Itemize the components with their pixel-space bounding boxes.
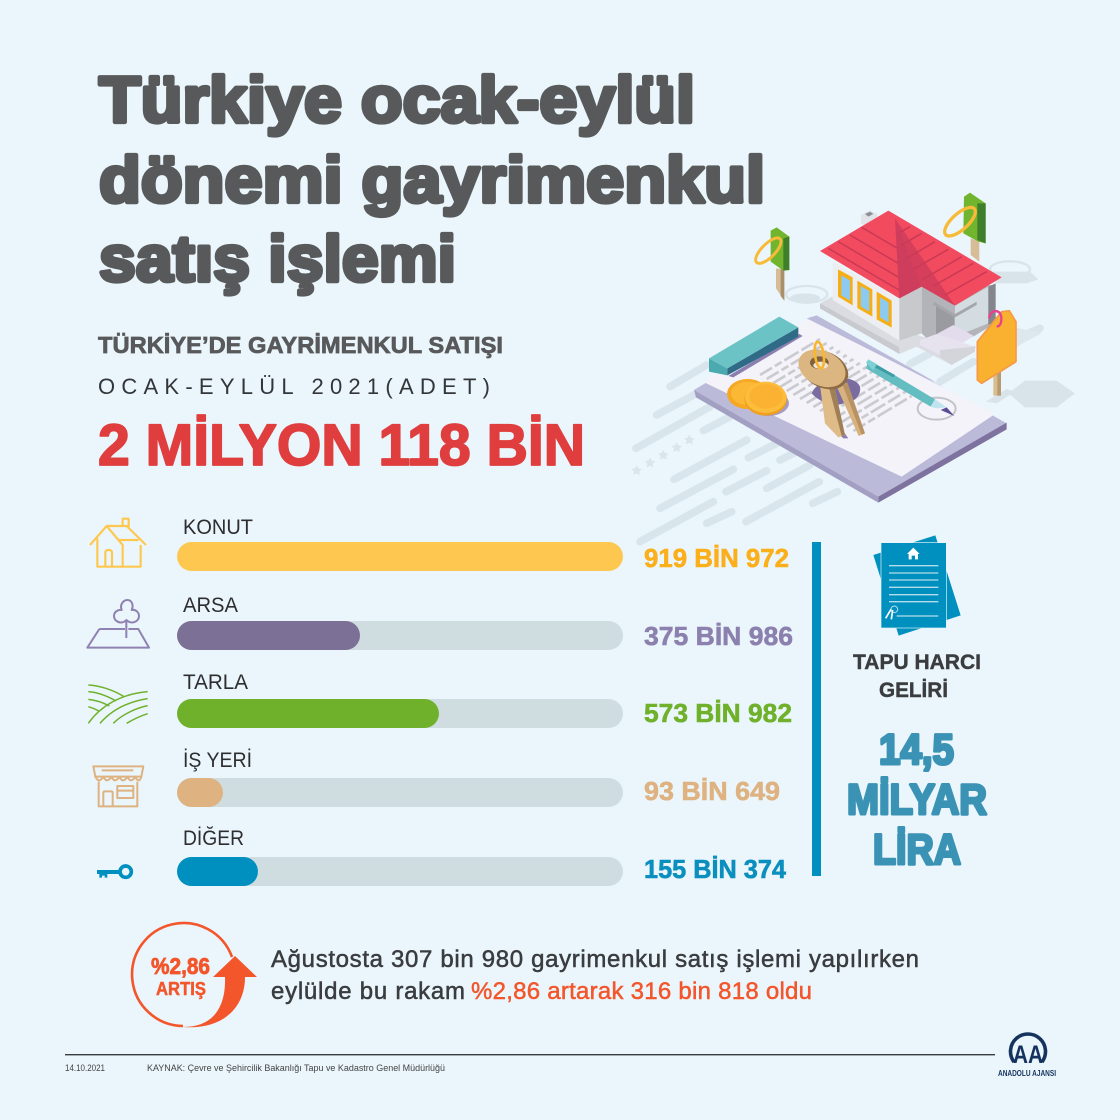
category: TARLA bbox=[88, 671, 792, 728]
title: satış işlemi bbox=[99, 222, 456, 295]
teal block bbox=[709, 317, 803, 377]
icon: house bbox=[90, 519, 146, 567]
heading bbox=[853, 651, 981, 702]
callout: increase bbox=[132, 923, 919, 1027]
increase label: ARTIŞ bbox=[156, 979, 206, 999]
logo: Anadolu Ajansı bbox=[998, 1034, 1056, 1078]
total figure: 2 MİLYON 118 BİN bbox=[98, 413, 585, 478]
footer rule bbox=[65, 1054, 995, 1055]
figure: MİLYAR bbox=[847, 776, 987, 824]
value: 375 BİN 986 bbox=[644, 621, 793, 651]
value: 573 BİN 982 bbox=[644, 698, 792, 728]
category: DİĞER bbox=[97, 827, 787, 886]
bar fill bbox=[177, 621, 360, 650]
title: Türkiye ocak-eylül bbox=[99, 63, 695, 136]
logo: Anadolu Ajansı: AA bbox=[1013, 1041, 1043, 1069]
category: ARSA bbox=[87, 594, 793, 651]
keys bbox=[792, 341, 865, 438]
logo: Anadolu Ajansı: ANADOLU AJANSI bbox=[998, 1069, 1056, 1078]
icon: title deed documents bbox=[873, 535, 961, 636]
pen bbox=[866, 359, 954, 416]
bar fill bbox=[177, 857, 258, 886]
stars bbox=[631, 435, 695, 475]
label: KONUT bbox=[183, 516, 253, 539]
roof bbox=[820, 211, 1002, 306]
house bbox=[820, 211, 1002, 365]
ground shadows bbox=[786, 261, 1075, 407]
stamp circle bbox=[918, 398, 956, 420]
illustration: house, document, keys bbox=[631, 193, 1075, 542]
chimney bbox=[861, 211, 877, 227]
icon: shop bbox=[93, 766, 143, 806]
period label: OCAK-EYLÜL 2021(ADET) bbox=[98, 374, 490, 399]
icon: fields bbox=[88, 685, 148, 723]
bar fill bbox=[177, 778, 223, 807]
value: 155 BİN 374 bbox=[644, 854, 787, 884]
label: İŞ YERİ bbox=[183, 749, 252, 772]
icon: key bbox=[97, 866, 131, 878]
date: 14.10.2021 bbox=[65, 1063, 105, 1073]
value: 919 BİN 972 bbox=[644, 543, 789, 573]
vertical divider bar bbox=[812, 542, 821, 876]
sentence line 1: Ağustosta 307 bin 980 gayrimenkul satış işlemi yapılırken bbox=[271, 946, 919, 973]
heading: GELİRİ bbox=[879, 679, 948, 702]
sentence highlight: %2,86 artarak 316 bin 818 oldu bbox=[471, 978, 812, 1005]
bar track bbox=[177, 778, 623, 807]
bar track bbox=[177, 699, 623, 728]
category: KONUT bbox=[90, 516, 789, 573]
background stripes bbox=[636, 328, 1040, 542]
icon: circular arrow bbox=[132, 923, 257, 1027]
icon: land plot with tree bbox=[87, 600, 149, 648]
subtitle: TÜRKİYE’DE GAYRİMENKUL SATIŞI bbox=[98, 332, 503, 358]
heading: TAPU HARCI bbox=[853, 651, 981, 674]
sentence line 2: eylülde bu rakam bbox=[271, 978, 465, 1005]
bar track bbox=[177, 857, 623, 886]
coins bbox=[727, 379, 789, 416]
bar bbox=[177, 542, 623, 571]
percent label: %2,86 bbox=[151, 953, 210, 979]
source: KAYNAK: Çevre ve Şehircilik Bakanlığı Tapu ve Kadastro Genel Müdürlüğü bbox=[147, 1063, 445, 1073]
figure: LİRA bbox=[873, 826, 961, 874]
category: İŞ YERİ bbox=[93, 749, 780, 807]
value: 93 BİN 649 bbox=[644, 776, 780, 806]
label: TARLA bbox=[183, 671, 248, 694]
bar fill bbox=[177, 699, 439, 728]
label: DİĞER bbox=[183, 827, 244, 850]
price tag bbox=[977, 311, 1016, 396]
label: ARSA bbox=[183, 594, 238, 617]
panel: land registry fee revenue bbox=[847, 535, 987, 874]
document board bbox=[694, 315, 1007, 503]
figure bbox=[847, 726, 987, 874]
bar track bbox=[177, 621, 623, 650]
key: left green bbox=[752, 227, 789, 301]
figure: 14,5 bbox=[879, 726, 954, 774]
title: dönemi gayrimenkul bbox=[99, 143, 765, 216]
windows bbox=[838, 269, 892, 328]
document text lines bbox=[760, 339, 912, 431]
title bbox=[99, 63, 765, 295]
key: right green bbox=[940, 193, 986, 262]
